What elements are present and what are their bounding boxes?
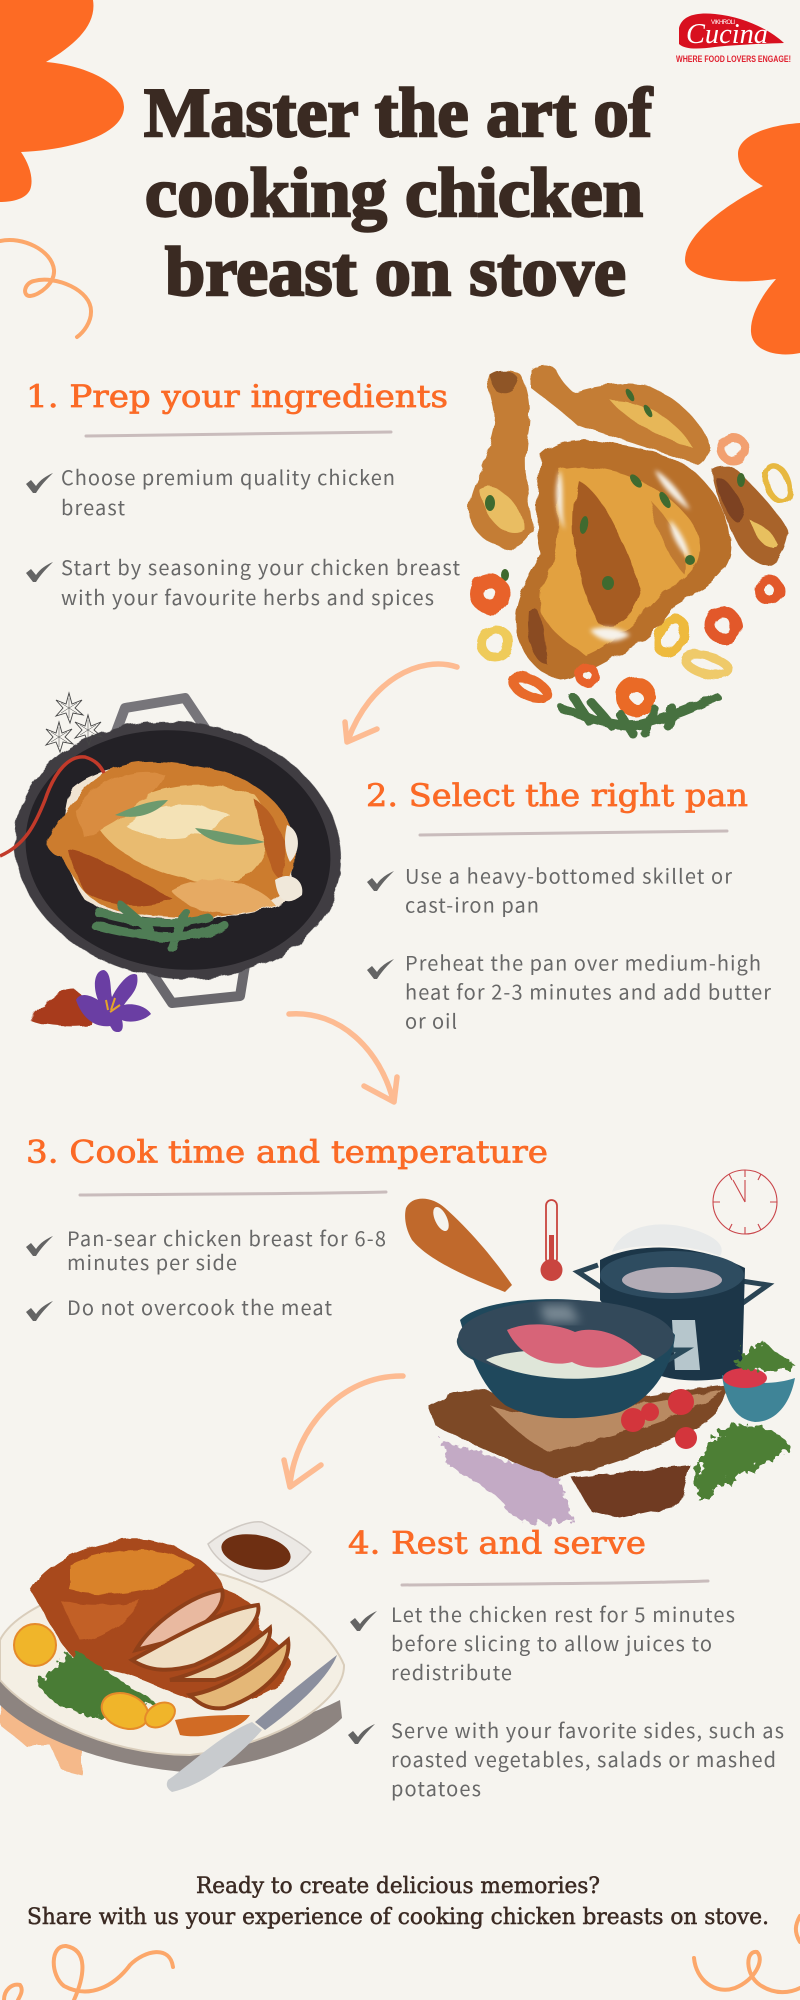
lemon slices bbox=[14, 1624, 179, 1735]
bullet 1 bbox=[26, 462, 395, 521]
bullet 2: roasted vegetables, salads or mashed bbox=[391, 1744, 776, 1773]
roast chicken bbox=[47, 761, 296, 919]
vegetable rings bbox=[477, 437, 794, 710]
bullet 1: before slicing to allow juices to bbox=[391, 1628, 712, 1657]
meat slices bbox=[132, 1590, 288, 1708]
greens bbox=[695, 1342, 795, 1502]
heading: 3. Cook time and temperature bbox=[26, 1134, 548, 1170]
bullet 2: or oil bbox=[405, 1006, 457, 1034]
bullet 2: potatoes bbox=[391, 1773, 481, 1802]
section 4: rest and serve bbox=[348, 1526, 784, 1802]
clock bbox=[713, 1170, 777, 1234]
rosemary sprig bbox=[562, 697, 716, 735]
bullet 1 bbox=[26, 1223, 386, 1276]
saute pan bbox=[458, 1299, 685, 1418]
bullet 1 bbox=[350, 1599, 735, 1686]
knife bbox=[167, 1655, 337, 1792]
bullet 2: with your favourite herbs and spices bbox=[61, 582, 434, 611]
bullet 2 bbox=[26, 552, 460, 611]
cutting board bbox=[428, 1385, 726, 1477]
title bbox=[144, 75, 653, 311]
plate shadow bbox=[0, 1675, 342, 1772]
wooden spoon bbox=[405, 1199, 512, 1292]
bullet 1: cast-iron pan bbox=[405, 890, 539, 918]
bullet 1: Let the chicken rest for 5 minutes bbox=[391, 1599, 735, 1628]
pan body bbox=[0, 700, 358, 1000]
bullet 1: Use a heavy-bottomed skillet or bbox=[405, 860, 732, 890]
arrow: step 1 to step 2 bbox=[345, 664, 457, 742]
squiggle: bottom left bbox=[4, 1946, 173, 2000]
herb flecks bbox=[485, 387, 745, 590]
orange drips bbox=[0, 1695, 82, 1775]
saffron flower bbox=[76, 970, 151, 1032]
bullet 1: Pan-sear chicken breast for 6-8 bbox=[67, 1223, 386, 1252]
squiggle: bottom right bbox=[694, 1916, 800, 1992]
bullet 1: Choose premium quality chicken bbox=[61, 462, 395, 491]
call to action bbox=[27, 1874, 769, 1930]
logo bbox=[676, 14, 791, 64]
bullet 1: breast bbox=[61, 492, 125, 521]
illustration: sliced roast on a plate bbox=[0, 1522, 344, 1792]
plate bbox=[0, 1570, 344, 1755]
sauce bbox=[175, 1715, 250, 1736]
pan handles bbox=[113, 698, 205, 740]
section 1: prep your ingredients bbox=[26, 379, 460, 611]
decorative blob: top right bbox=[685, 123, 800, 354]
bullet 2: heat for 2-3 minutes and add butter bbox=[405, 976, 771, 1006]
decorative blob: top left bbox=[0, 0, 124, 202]
illustration: roast chicken in cast-iron pan bbox=[0, 693, 358, 1032]
saffron pile bbox=[30, 990, 92, 1026]
red accent line bbox=[0, 757, 104, 856]
bullet 2: Do not overcook the meat bbox=[67, 1292, 332, 1321]
bullet 2 bbox=[348, 1715, 784, 1802]
tomatoes bbox=[621, 1389, 697, 1449]
stock pot bbox=[578, 1224, 768, 1380]
section 2: select the right pan bbox=[366, 778, 771, 1034]
star anise bbox=[46, 693, 102, 752]
purple splash bbox=[442, 1440, 572, 1523]
herbs in pan bbox=[95, 905, 224, 948]
thermometer bbox=[540, 1200, 562, 1281]
arrow: step 2 to step 3 bbox=[289, 1014, 397, 1102]
title: cooking chicken bbox=[145, 155, 643, 232]
heading: 4. Rest and serve bbox=[348, 1526, 646, 1562]
illustration: raw seasoned chicken bbox=[469, 365, 794, 735]
meat bbox=[507, 1324, 642, 1368]
title: Master the art of bbox=[144, 75, 653, 152]
bullet 2: Preheat the pan over medium-high bbox=[405, 948, 761, 976]
logo name: Cucina bbox=[686, 19, 768, 50]
arrow: step 3 to step 4 bbox=[284, 1376, 403, 1487]
bullet 1 bbox=[367, 860, 732, 918]
call to action: Ready to create delicious memories? bbox=[196, 1874, 600, 1899]
bullet 1: redistribute bbox=[391, 1657, 512, 1686]
bullet 2: Serve with your favorite sides, such as bbox=[391, 1715, 784, 1744]
sauce bowl bbox=[208, 1522, 311, 1582]
roast meat bbox=[30, 1539, 290, 1705]
heading: 1. Prep your ingredients bbox=[26, 379, 448, 415]
logo location: VIKHROLI bbox=[711, 20, 735, 26]
bullet 2 bbox=[367, 948, 771, 1034]
herbs bbox=[38, 1650, 155, 1718]
bullet 1: minutes per side bbox=[67, 1247, 237, 1276]
call to action: Share with us your experience of cooking chicken breasts on stove. bbox=[27, 1905, 769, 1930]
bowl bbox=[722, 1368, 795, 1422]
squiggle: top left bbox=[0, 240, 91, 337]
wood stump bbox=[572, 1465, 690, 1518]
section 3: cook time and temperature bbox=[26, 1134, 548, 1321]
illustration: pots, pan, board and ingredients bbox=[405, 1170, 795, 1523]
bullet 2: Start by seasoning your chicken breast bbox=[61, 552, 460, 581]
title: breast on stove bbox=[165, 234, 626, 311]
heading: 2. Select the right pan bbox=[366, 778, 748, 814]
logo mark bbox=[679, 14, 784, 49]
